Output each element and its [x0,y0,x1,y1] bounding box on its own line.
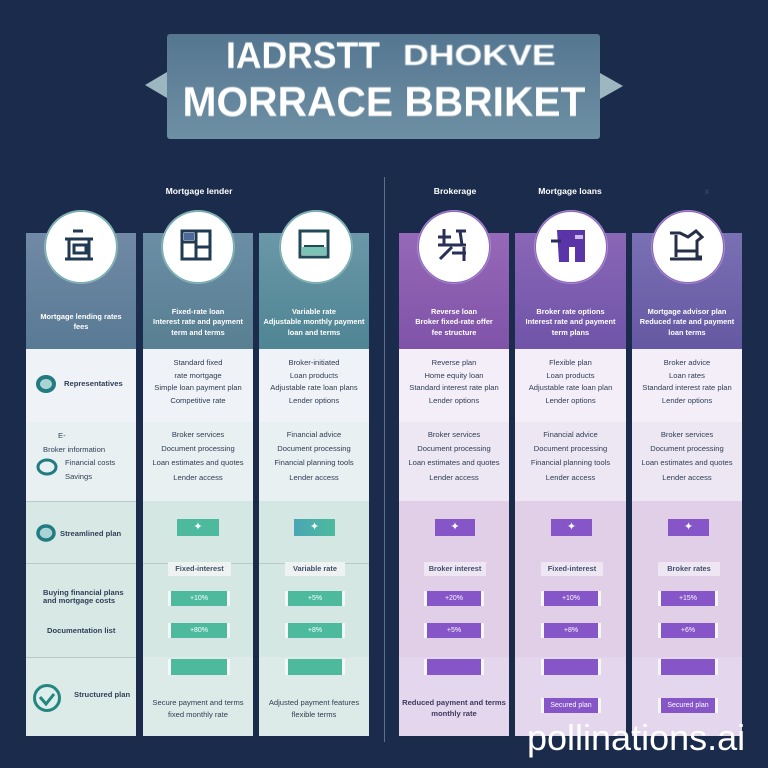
bar 1 [541,591,601,606]
label box [285,562,345,576]
header text [40,312,122,331]
label box [658,562,720,576]
row text: Lender options [429,396,479,405]
row label 4 [43,588,124,605]
header text: Fixed-rate loan [172,307,224,316]
icon: row 2 ring [36,458,58,476]
row 1 [632,349,742,422]
row text: Lender access [289,473,339,482]
label box: Broker interest [429,564,481,573]
bar 4 [541,698,601,713]
bottom text: Adjusted payment features [269,698,359,707]
row text: Adjustable rate loan plans [270,383,358,392]
column 4 header [399,233,509,349]
row 1 [399,349,509,422]
row text [152,430,244,482]
header text: Broker rate options [536,307,605,316]
row text: Document processing [161,444,235,453]
icon: tray [670,229,704,260]
row divider 4 [26,563,136,564]
header text [640,307,734,337]
icon chip [551,519,592,536]
header text: Interest rate and payment [526,317,615,326]
header text: Broker fixed-rate offer [415,317,493,326]
label box: Fixed-interest [548,564,596,573]
row text: Adjustable rate loan plan [529,383,612,392]
icon circle: column 4 [418,211,490,283]
bar 3 [424,659,484,675]
row text: Standard interest rate plan [409,383,499,392]
icon chip: ✦ [684,521,693,533]
row text: rate mortgage [174,371,222,380]
bottom text [402,698,506,718]
row 2 [632,422,742,501]
row text: Financial advice [287,430,341,439]
column 5 header [515,233,626,349]
label box: Broker rates [667,564,711,573]
banner ribbon tip right [600,73,623,99]
row 5 [26,657,136,736]
icon chip: ✦ [193,521,203,533]
bar 2 [285,623,345,638]
row text: Lender options [289,396,339,405]
header text: Interest rate and payment [153,317,243,326]
header text: Mortgage lending rates [40,312,122,321]
bar 4: Secured plan [550,702,592,709]
row text: Loan products [290,371,338,380]
row text: Loan products [546,371,595,380]
row text [531,430,610,482]
row text [270,358,358,405]
header text: loan and terms [288,328,340,337]
icon: purple form [551,230,585,262]
row text: Financial planning tools [274,458,354,467]
row 5 bg [259,657,369,736]
header text: fees [74,322,88,331]
row text [642,358,732,405]
label box [541,562,603,576]
column 6 header [632,233,742,349]
icon chip: ✦ [450,521,460,533]
header text: Variable rate [292,307,336,316]
row text: Financial planning tools [531,458,610,467]
bar 2: +6% [681,627,695,634]
header text: Reverse loan [431,307,477,316]
column group label left: Mortgage lender [166,186,232,196]
icon chip: ✦ [567,521,576,533]
row text: Broker services [172,430,224,439]
row 2 [26,422,136,501]
icon chip [177,519,219,536]
row label 4: Buying financial plans [43,588,124,597]
icon: document building [65,230,93,260]
row text: Broker advice [664,358,710,367]
label box: Variable rate [293,564,337,573]
row text: Lender options [662,396,712,405]
row text [154,358,242,405]
bar 1 [168,591,230,606]
row text: Document processing [277,444,351,453]
row label 3: Streamlined plan [60,529,121,538]
row 2 [515,422,626,501]
row divider 3 [26,501,136,502]
row text [408,430,500,482]
icon: row 5 check [33,684,61,712]
row 1 [259,349,369,422]
column 2 header [143,233,253,349]
bar 2: +8% [308,627,322,634]
icon chip [435,519,475,536]
bar 1: +15% [679,595,697,602]
row label 2: Savings [65,472,92,480]
row divider 3 [143,563,253,564]
icon: arrows [438,229,466,261]
row 2 [259,422,369,501]
row text: Loan estimates and quotes [408,458,500,467]
row text: Simple loan payment plan [154,383,242,392]
title line 1 word 2: DHOKVE [403,40,556,72]
row text: Competitive rate [170,396,226,405]
bar 1: +10% [562,595,580,602]
bar 4 [658,698,718,713]
column group label right 1: Brokerage [434,186,476,196]
panel: column 1 [26,233,136,736]
row text [641,430,733,482]
label box [168,562,231,576]
row text: Standard fixed [174,358,222,367]
bar 3 [168,659,230,675]
bottom text: fixed monthly rate [168,710,228,719]
bar 2 [658,623,718,638]
row divider 3 [259,563,369,564]
row text [274,430,354,482]
row 2 [399,422,509,501]
watermark: pollinations.ai [527,717,745,758]
header text: fee structure [432,328,476,337]
header text: Adjustable monthly payment [263,317,365,326]
row 5 bg [399,657,509,736]
row text: Document processing [650,444,724,453]
title line 2: MORRACE BBRIKET [183,78,585,125]
row text: Standard interest rate plan [642,383,732,392]
row text: Loan rates [669,371,705,380]
banner ribbon tip left [145,72,167,98]
icon: forms [180,230,212,260]
bar 2 [168,623,230,638]
row 5 bg [143,657,253,736]
bar 1: +20% [445,595,463,602]
icon: row 3 ring [36,524,56,542]
column 3 header [259,233,369,349]
label box: Fixed-interest [175,564,224,573]
header text: term plans [552,328,589,337]
panel: column 6 [632,233,742,736]
row label 5: Structured plan [74,690,130,699]
row text: Loan estimates and quotes [152,458,244,467]
icon circle: column 2 [162,211,234,283]
bottom text: Reduced payment and terms [402,698,506,707]
row text: Lender access [173,473,223,482]
row text [409,358,499,405]
row text: Document processing [417,444,491,453]
row 5 bg [515,657,626,736]
header text [153,307,243,337]
panel: column 4 [399,233,509,736]
bar 2 [424,623,484,638]
bar 1: +10% [190,595,208,602]
bottom text [269,698,359,719]
row label 2: E- [58,431,66,440]
header text: term and terms [171,328,225,337]
row text: Lender access [546,473,595,482]
bar 2: +80% [190,627,208,634]
row label 2: Broker information [43,444,105,454]
panel: column 2 [143,233,253,736]
bar 2: +5% [447,627,461,634]
header text [526,307,616,337]
column group label right 2: Mortgage loans [538,186,602,196]
icon: row 1 target [36,375,56,393]
bar 3 [541,659,601,675]
icon: card [298,230,330,258]
row text: Lender access [429,473,479,482]
column 1 header [26,233,136,349]
banner panel [167,34,600,139]
icon circle: column 1 [45,211,117,283]
header text [263,307,365,337]
row label 2: Financial costs [65,458,115,467]
small mark: x [705,186,709,196]
row divider 5 [26,657,136,658]
bar 1 [424,591,484,606]
row text: Lender access [662,473,712,482]
bar 4: Secured plan [667,702,709,709]
header text [415,307,493,337]
row text: Reverse plan [432,358,476,367]
row 2 [143,422,253,501]
row text: Broker services [661,430,713,439]
row label 2 [43,431,115,480]
center divider [384,177,385,742]
icon chip: ✦ [310,521,319,533]
bar 1 [658,591,718,606]
header text: Reduced rate and payment [640,317,734,326]
row text: Broker services [428,430,480,439]
header text: loan terms [668,328,706,337]
row label 1: Representatives [64,379,123,388]
panel: column 3 [259,233,369,736]
bar 2 [541,623,601,638]
icon circle: column 3 [280,211,352,283]
bottom text: monthly rate [431,709,477,718]
row 1 [143,349,253,422]
icon chip [294,519,335,536]
panel: column 5 [515,233,626,736]
bar 3 [658,659,718,675]
label box [424,562,486,576]
row text: Document processing [534,444,607,453]
row text [528,358,612,405]
bar 3 [285,659,345,675]
row text: Lender options [545,396,596,405]
row text: Broker-initiated [288,358,340,367]
title banner [145,34,623,139]
row label 4b: Documentation list [47,626,115,635]
bottom text: Secure payment and terms [152,698,244,707]
icon circle: column 6 [652,211,724,283]
bar 2: +8% [564,627,578,634]
bar 1 [285,591,345,606]
icon chip [668,519,709,536]
row text: Financial advice [543,430,598,439]
row text: Home equity loan [424,371,484,380]
bottom text [152,698,244,719]
row 1 [26,349,136,422]
bottom text: flexible terms [292,710,336,719]
row text: Flexible plan [549,358,592,367]
row 1 [515,349,626,422]
row label 4: and mortgage costs [43,596,115,605]
icon circle: column 5 [535,211,607,283]
row text: Loan estimates and quotes [641,458,733,467]
bar 1: +5% [308,595,322,602]
row 5 bg [632,657,742,736]
header text: Mortgage advisor plan [648,307,726,316]
title line 1 word 1: IADRSTT [226,35,380,76]
